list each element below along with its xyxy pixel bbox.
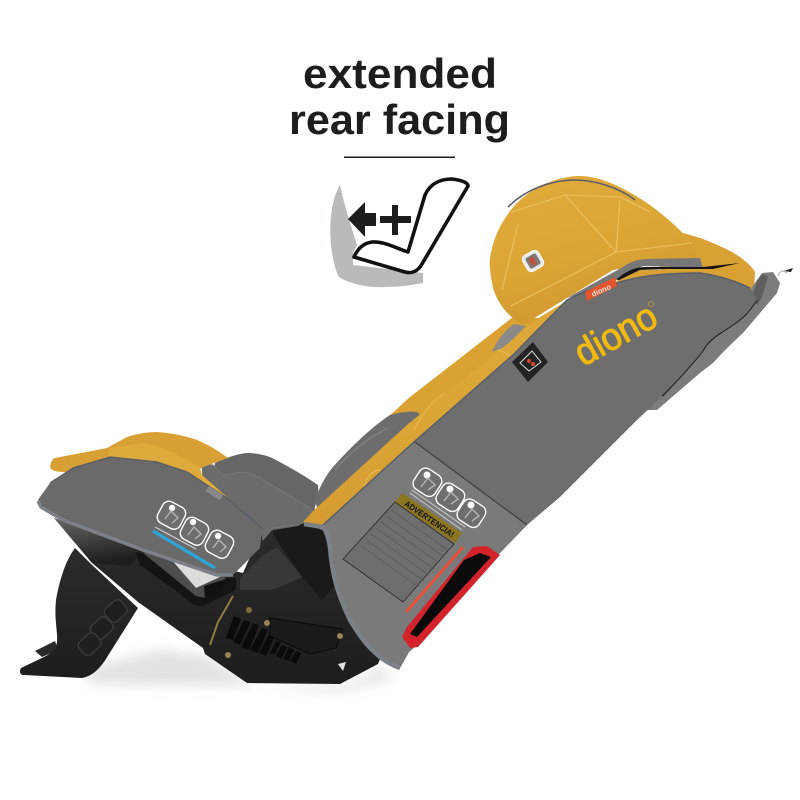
title <box>289 50 510 143</box>
lower seat: yellow pillow <box>50 432 228 475</box>
brand logo: diono <box>567 295 665 375</box>
headrest badge <box>521 249 545 273</box>
base: back cap <box>273 522 336 600</box>
base: main body <box>54 518 384 684</box>
red strip <box>406 547 463 612</box>
seat back: gray cushion seam <box>335 428 388 470</box>
seat cushion: upper gray <box>212 453 318 532</box>
seat cushion: arm piece <box>202 465 314 540</box>
icon: extended rear facing seat <box>330 179 468 287</box>
orange tag <box>585 277 617 301</box>
dark slit <box>617 263 740 282</box>
car seat <box>20 176 793 684</box>
lower seat: side panel <box>38 457 262 575</box>
lower seat: yellow cushion top <box>38 443 262 528</box>
yellow lip <box>590 269 702 300</box>
base: recline slots <box>226 616 301 664</box>
pictogram labels: seat <box>153 499 236 568</box>
warning label: ADVERTENCIA! <box>403 498 456 539</box>
gray ribbon under headrest <box>567 258 703 298</box>
orange tag: diono <box>590 282 613 299</box>
title: extended <box>303 50 497 97</box>
base: front leg <box>20 548 138 678</box>
seat back: gray patch by headrest <box>492 324 526 352</box>
hang tag <box>512 342 548 382</box>
title: rear facing <box>289 96 510 143</box>
seat back: yellow band <box>303 299 590 526</box>
red handle pocket <box>402 546 500 648</box>
seat back: gray cushion <box>315 412 432 515</box>
upper wing: yellow <box>650 233 755 290</box>
warning label <box>343 493 462 602</box>
base: plate and screws <box>225 607 346 671</box>
hook <box>778 268 793 276</box>
back flap <box>645 272 780 410</box>
ground shadow <box>85 650 395 692</box>
divider line <box>344 156 455 158</box>
headrest <box>490 176 700 325</box>
base: rear foot <box>35 641 58 657</box>
seat back: upper yellow layer <box>387 317 540 432</box>
main side panel <box>304 273 757 668</box>
pictogram labels: back <box>410 465 488 530</box>
